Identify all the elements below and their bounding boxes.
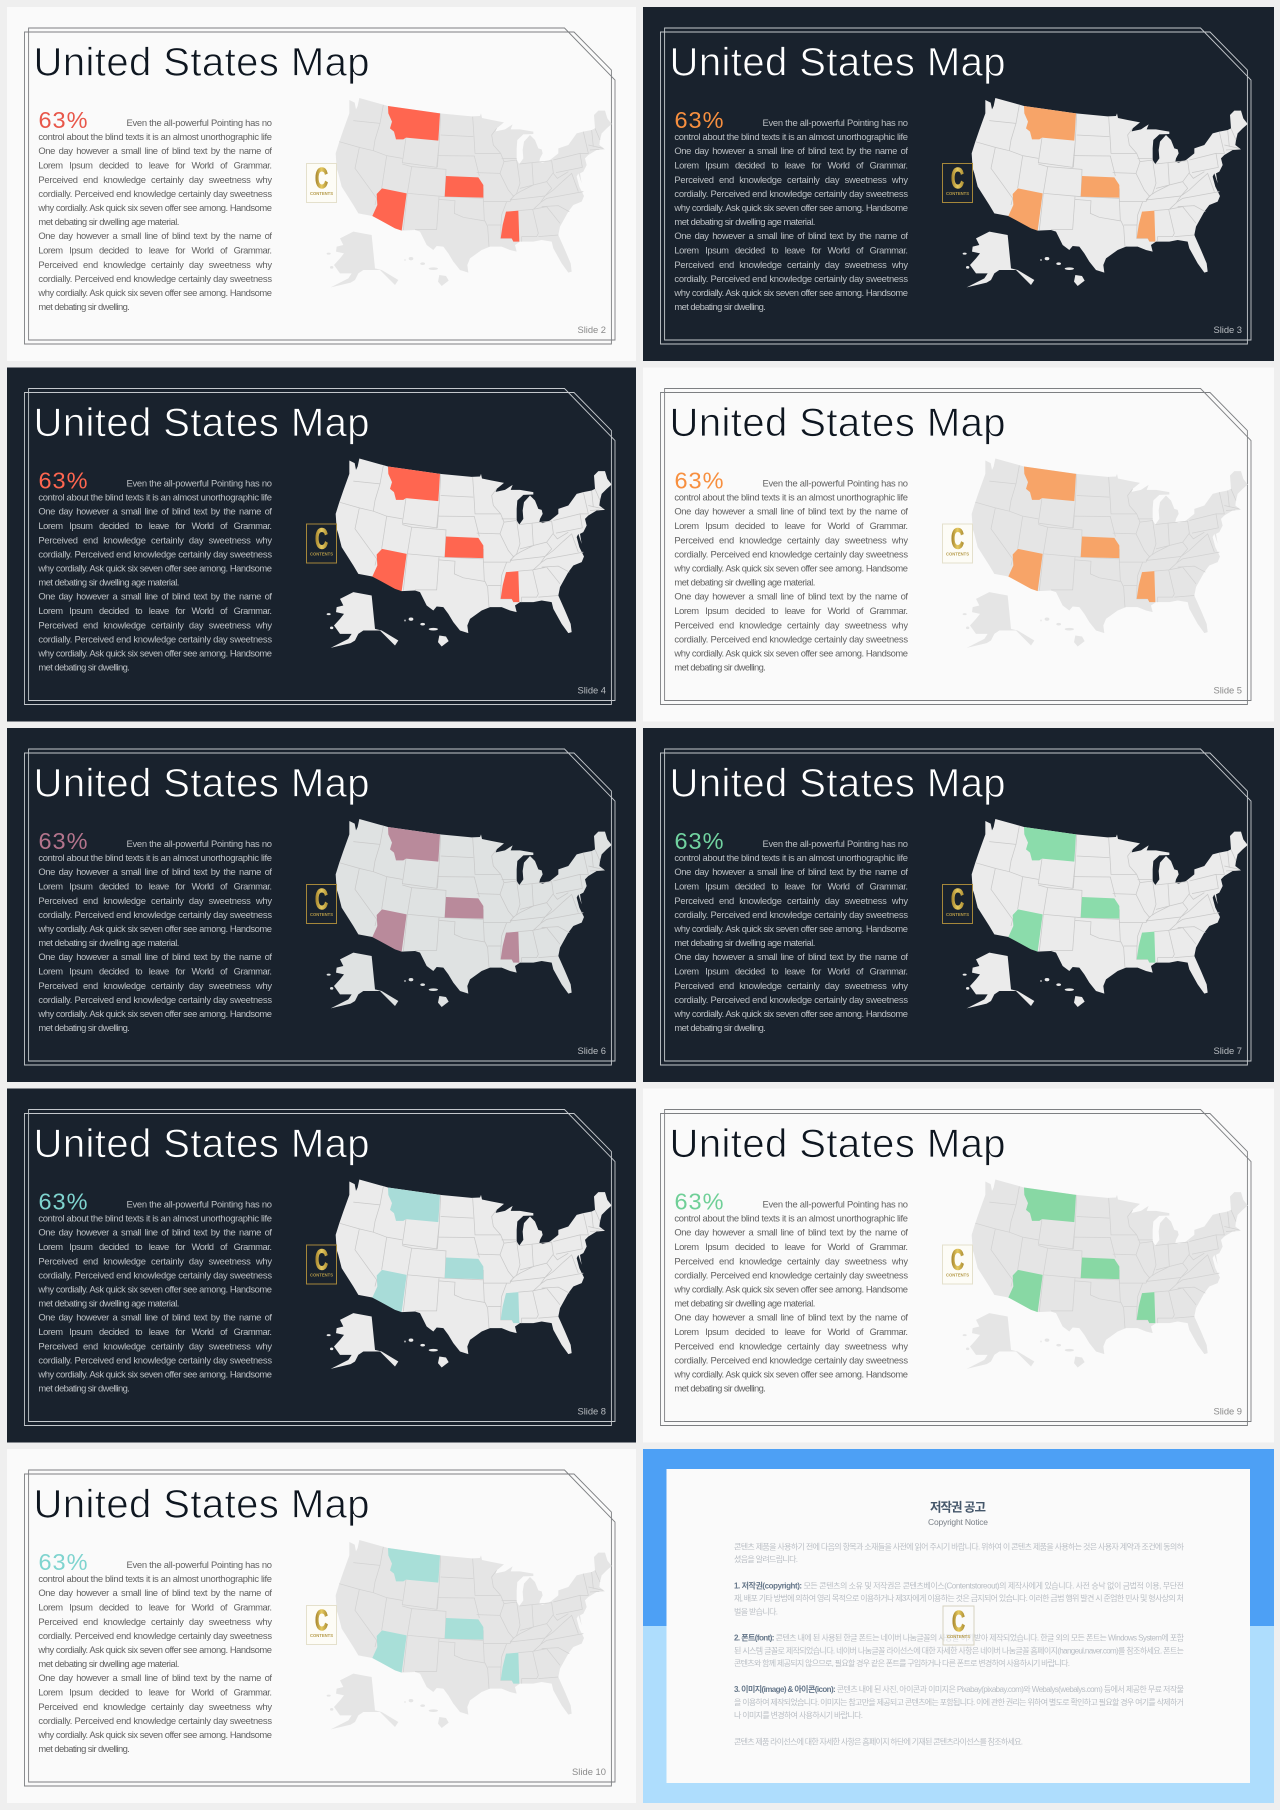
body text: Perceived end knowledge certainly day sweetness why (38, 534, 272, 546)
logo: C (951, 884, 964, 916)
body text: One day however a small line of blind text by the name of (674, 1312, 908, 1322)
body text: control about the blind texts it is an almost unorthographic life (38, 852, 272, 863)
body text: Perceived end knowledge certainly day sweetness why (674, 1340, 908, 1352)
body text: Lorem Ipsum decided to leave for World of Grammar. (38, 1326, 272, 1337)
map (963, 819, 1248, 1008)
body text: cordially. Perceived end knowledge certainly day sweetness (38, 909, 272, 920)
notice text: 콘텐츠 제품 라이선스에 대한 자세한 사항은 홈페이지 하단에 기재된 콘텐츠라이선스를 참조하세요. (734, 1736, 1023, 1746)
logo: CONTENTS (310, 191, 333, 196)
panel: slide 2 light red (7, 7, 636, 361)
statistic: 63% (674, 468, 724, 494)
body text: control about the blind texts it is an almost unorthographic life (38, 1573, 272, 1584)
body text: control about the blind texts it is an almost unorthographic life (38, 131, 272, 142)
body text: why cordially. Ask quick six seven offer see among. Handsome (37, 287, 272, 298)
logo: C (951, 163, 964, 195)
body text: Even the all-powerful Pointing has no (762, 478, 908, 488)
body text: Perceived end knowledge certainly day sweetness why (38, 1256, 272, 1266)
body text: met debating sir dwelling. (38, 301, 130, 312)
body text: Perceived end knowledge certainly day sweetness why (38, 895, 272, 906)
heading: United States Map (34, 762, 370, 806)
map (963, 98, 1248, 287)
logo: C (315, 1244, 328, 1276)
body text: cordially. Perceived end knowledge certainly day sweetness (38, 273, 272, 284)
body text: One day however a small line of blind text by the name of (674, 506, 908, 516)
slide number: Slide 6 (578, 1045, 606, 1056)
body text: Lorem Ipsum decided to leave for World of Grammar. (38, 966, 272, 976)
panel: slide 4 dark red (7, 368, 636, 722)
body text: Lorem Ipsum decided to leave for World of Grammar. (38, 1602, 272, 1612)
body text: Perceived end knowledge certainly day sweetness why (674, 980, 908, 991)
body text: met debating sir dwelling. (674, 1022, 766, 1033)
body text: Even the all-powerful Pointing has no (762, 117, 908, 128)
body text: cordially. Perceived end knowledge certainly day sweetness (674, 1270, 908, 1280)
body text: cordially. Perceived end knowledge certainly day sweetness (38, 634, 272, 644)
body text: Perceived end knowledge certainly day sweetness why (38, 1701, 272, 1712)
body text: cordially. Perceived end knowledge certainly day sweetness (38, 994, 272, 1005)
logo: CONTENTS (947, 1634, 970, 1639)
statistic: 63% (38, 468, 88, 494)
heading: United States Map (670, 762, 1006, 806)
body text: met debating sir dwelling age material. (38, 1658, 179, 1669)
logo (306, 1244, 336, 1284)
notice subtitle: Copyright Notice (928, 1517, 988, 1527)
heading: United States Map (34, 40, 370, 84)
heading: United States Map (34, 1122, 370, 1166)
panel: slide 8 dark teal (7, 1088, 636, 1442)
body text: One day however a small line of blind text by the name of (38, 230, 272, 241)
body text: One day however a small line of blind text by the name of (674, 145, 908, 156)
body text (673, 1198, 908, 1394)
body text: Perceived end knowledge certainly day sweetness why (38, 1340, 272, 1352)
body text: met debating sir dwelling age material. (674, 1298, 815, 1308)
body text: met debating sir dwelling age material. (674, 937, 815, 948)
body text: met debating sir dwelling. (674, 301, 766, 312)
map (327, 1540, 612, 1729)
body text: cordially. Perceived end knowledge certainly day sweetness (38, 188, 272, 199)
logo: CONTENTS (310, 552, 333, 556)
panel: slide 9 light green (643, 1088, 1274, 1442)
body text: Perceived end knowledge certainly day sweetness why (674, 895, 908, 906)
logo (306, 524, 336, 563)
notice text (734, 1542, 1185, 1746)
panel: slide 7 dark green (643, 728, 1274, 1082)
map (327, 458, 612, 648)
body text: met debating sir dwelling age material. (38, 216, 179, 227)
body text: why cordially. Ask quick six seven offer see among. Handsome (37, 1284, 272, 1294)
body text (37, 1198, 272, 1394)
body text: cordially. Perceived end knowledge certainly day sweetness (38, 548, 272, 560)
notice text: 2. 폰트(font): 콘텐츠 내에 된 사용된 한글 폰트는 네이버 나눔글꼴의 사용을 허가받아 제작되었습니다. 한글 외의 모든 폰트는 Windows System에 포함 (734, 1632, 1185, 1642)
statistic: 63% (674, 828, 724, 854)
body text: why cordially. Ask quick six seven offer see among. Handsome (673, 287, 908, 298)
body text: met debating sir dwelling. (38, 1022, 130, 1033)
slide number: Slide 7 (1214, 1045, 1242, 1056)
body text (37, 838, 272, 1033)
body text: met debating sir dwelling. (38, 1382, 130, 1394)
slide number: Slide 5 (1214, 684, 1242, 696)
body text: One day however a small line of blind text by the name of (38, 1672, 272, 1683)
body text: One day however a small line of blind text by the name of (38, 1226, 272, 1238)
body text: why cordially. Ask quick six seven offer see among. Handsome (673, 1368, 908, 1380)
body text: control about the blind texts it is an almost unorthographic life (674, 1212, 908, 1224)
body text: Perceived end knowledge certainly day sweetness why (674, 620, 908, 630)
logo: C (315, 524, 328, 556)
body text: cordially. Perceived end knowledge certainly day sweetness (674, 273, 908, 284)
logo: CONTENTS (946, 1272, 969, 1278)
body text: One day however a small line of blind text by the name of (674, 590, 908, 602)
body text: One day however a small line of blind text by the name of (38, 1587, 272, 1598)
body text: Even the all-powerful Pointing has no (126, 1198, 272, 1210)
body text: control about the blind texts it is an almost unorthographic life (38, 1212, 272, 1224)
body text: why cordially. Ask quick six seven offer see among. Handsome (37, 1729, 272, 1740)
body text: One day however a small line of blind text by the name of (674, 951, 908, 962)
body text: One day however a small line of blind text by the name of (674, 1226, 908, 1238)
body text: One day however a small line of blind text by the name of (38, 866, 272, 877)
statistic: 63% (38, 1549, 88, 1575)
slide number: Slide 3 (1214, 324, 1242, 335)
map (963, 1179, 1248, 1369)
body text: why cordially. Ask quick six seven offer see among. Handsome (673, 648, 908, 658)
body text: Lorem Ipsum decided to leave for World of Grammar. (38, 880, 272, 892)
body text: Lorem Ipsum decided to leave for World of Grammar. (674, 520, 908, 531)
body text (37, 117, 272, 312)
logo (942, 884, 972, 924)
body text: Even the all-powerful Pointing has no (762, 838, 908, 849)
logo (942, 163, 972, 202)
body text: Perceived end knowledge certainly day sweetness why (674, 1256, 908, 1266)
logo (306, 884, 336, 924)
body text: met debating sir dwelling age material. (674, 576, 815, 588)
body text: Even the all-powerful Pointing has no (126, 117, 272, 128)
logo (942, 1244, 972, 1284)
body text: One day however a small line of blind text by the name of (674, 866, 908, 877)
body text: met debating sir dwelling age material. (38, 1298, 179, 1308)
notice text: 벌을 받습니다. (734, 1606, 778, 1616)
body text: Even the all-powerful Pointing has no (762, 1198, 908, 1210)
body text: why cordially. Ask quick six seven offer see among. Handsome (37, 923, 272, 934)
statistic: 63% (38, 107, 88, 133)
body text: Lorem Ipsum decided to leave for World of Grammar. (38, 605, 272, 616)
map (327, 98, 612, 287)
body text: cordially. Perceived end knowledge certainly day sweetness (674, 548, 908, 560)
body text: Lorem Ipsum decided to leave for World of Grammar. (674, 605, 908, 616)
body text: Perceived end knowledge certainly day sweetness why (674, 259, 908, 270)
logo: C (952, 1606, 965, 1638)
logo (942, 524, 972, 563)
notice text: 을 이용하여 제작되었습니다. 이미지는 참고만을 제공되고 콘텐츠에는 포함됩니다. 이에 관한 권리는 위하여 별도로 확인하고 필요할 경우 여기를 삭제하거 (734, 1697, 1184, 1707)
body text: met debating sir dwelling. (38, 662, 130, 672)
body text: Lorem Ipsum decided to leave for World of Grammar. (38, 1686, 272, 1698)
notice title: 저작권 공고 (930, 1500, 986, 1514)
body text: cordially. Perceived end knowledge certainly day sweetness (38, 1630, 272, 1641)
slide number: Slide 10 (572, 1766, 606, 1777)
body text (673, 838, 908, 1033)
logo: C (315, 163, 328, 195)
logo: CONTENTS (946, 912, 969, 917)
map (963, 458, 1248, 648)
body text: Lorem Ipsum decided to leave for World of Grammar. (674, 1241, 908, 1252)
statistic: 63% (38, 1188, 88, 1214)
body text: Lorem Ipsum decided to leave for World of Grammar. (674, 244, 908, 256)
body text: One day however a small line of blind text by the name of (38, 506, 272, 516)
body text: One day however a small line of blind text by the name of (38, 951, 272, 962)
body text (37, 478, 272, 672)
body text: control about the blind texts it is an almost unorthographic life (674, 852, 908, 863)
body text: met debating sir dwelling age material. (38, 576, 179, 588)
panel: slide 6 dark mauve (7, 728, 636, 1082)
body text: why cordially. Ask quick six seven offer see among. Handsome (37, 202, 272, 213)
body text: Lorem Ipsum decided to leave for World of Grammar. (674, 880, 908, 892)
body text: met debating sir dwelling. (674, 662, 766, 672)
panel: slide 5 light orange (643, 368, 1274, 722)
body text: Perceived end knowledge certainly day sweetness why (674, 174, 908, 185)
body text: why cordially. Ask quick six seven offer see among. Handsome (37, 648, 272, 658)
heading: United States Map (670, 40, 1006, 84)
body text: cordially. Perceived end knowledge certainly day sweetness (674, 909, 908, 920)
map (327, 819, 612, 1008)
body text: cordially. Perceived end knowledge certainly day sweetness (674, 188, 908, 199)
notice text: 셨음을 알려드립니다. (734, 1554, 798, 1564)
body text: cordially. Perceived end knowledge certainly day sweetness (674, 1354, 908, 1366)
body text: why cordially. Ask quick six seven offer see among. Handsome (673, 1284, 908, 1294)
logo: CONTENTS (946, 191, 969, 196)
slide number: Slide 9 (1214, 1406, 1242, 1416)
heading: United States Map (34, 1482, 370, 1526)
statistic: 63% (38, 828, 88, 854)
body text: why cordially. Ask quick six seven offer see among. Handsome (673, 923, 908, 934)
body text: cordially. Perceived end knowledge certainly day sweetness (38, 1354, 272, 1366)
logo: CONTENTS (310, 1633, 333, 1638)
body text: One day however a small line of blind text by the name of (38, 590, 272, 602)
body text: control about the blind texts it is an almost unorthographic life (38, 492, 272, 502)
body text: Lorem Ipsum decided to leave for World of Grammar. (674, 1326, 908, 1337)
body text: met debating sir dwelling age material. (38, 937, 179, 948)
body text: Lorem Ipsum decided to leave for World of Grammar. (38, 244, 272, 256)
body text (673, 117, 908, 312)
body text: Even the all-powerful Pointing has no (126, 1559, 272, 1570)
logo: C (315, 1605, 328, 1637)
logo: C (951, 1244, 964, 1276)
logo: CONTENTS (946, 552, 969, 556)
logo (943, 1606, 974, 1645)
body text: Perceived end knowledge certainly day sweetness why (674, 534, 908, 546)
panel: slide 3 dark orange (643, 7, 1274, 361)
body text: Lorem Ipsum decided to leave for World of Grammar. (38, 160, 272, 170)
body text: why cordially. Ask quick six seven offer see among. Handsome (37, 1644, 272, 1655)
body text (37, 1559, 272, 1754)
body text: control about the blind texts it is an almost unorthographic life (674, 492, 908, 502)
body text: why cordially. Ask quick six seven offer see among. Handsome (673, 202, 908, 213)
body text: cordially. Perceived end knowledge certainly day sweetness (38, 1270, 272, 1280)
statistic: 63% (674, 1188, 724, 1214)
body text: Perceived end knowledge certainly day sweetness why (38, 980, 272, 991)
logo (306, 163, 336, 202)
body text: Lorem Ipsum decided to leave for World of Grammar. (674, 160, 908, 170)
body text: met debating sir dwelling. (674, 1382, 766, 1394)
body text: why cordially. Ask quick six seven offer see among. Handsome (37, 1008, 272, 1019)
notice text: 콘텐츠 제품을 사용하기 전에 다음의 항목과 소재들을 사전에 읽어 주시기 바랍니다. 위하여 이 콘텐츠 제품을 사용하는 것은 사용자 계약과 조건에 동의하 (734, 1542, 1185, 1552)
body text: why cordially. Ask quick six seven offer see among. Handsome (673, 1008, 908, 1019)
logo (306, 1605, 336, 1644)
body text: Even the all-powerful Pointing has no (126, 478, 272, 488)
body text: cordially. Perceived end knowledge certainly day sweetness (674, 634, 908, 644)
notice text: 1. 저작권(copyright): 모든 콘텐츠의 소유 및 저작권은 콘텐츠베이스(Contentstoreout)의 제작사에게 있습니다. 사전 승낙 없이 금법적 이용, 무단전 (734, 1580, 1184, 1590)
body text: met debating sir dwelling. (38, 1743, 130, 1754)
logo: C (951, 524, 964, 556)
heading: United States Map (670, 401, 1006, 445)
map (327, 1179, 612, 1369)
logo: C (315, 884, 328, 916)
heading: United States Map (34, 401, 370, 445)
body text: control about the blind texts it is an almost unorthographic life (674, 131, 908, 142)
logo: CONTENTS (310, 912, 333, 917)
body text: why cordially. Ask quick six seven offer see among. Handsome (37, 1368, 272, 1380)
body text: Lorem Ipsum decided to leave for World of Grammar. (38, 520, 272, 531)
body text: why cordially. Ask quick six seven offer see among. Handsome (37, 562, 272, 574)
notice text: 3. 이미지(image) & 아이콘(icon): 콘텐츠 내에 된 사진, 아이콘과 이미지은 Pixabay(pixabay.com)와 Webalys(webalys.com) 등에서 제공한 무료 저작물 (734, 1684, 1184, 1694)
slide number: Slide 8 (578, 1406, 606, 1416)
body text: why cordially. Ask quick six seven offer see among. Handsome (673, 562, 908, 574)
notice text: 콘텐츠와 함께 제공되지 않으므로, 필요할 경우 같은 폰트를 구입하거나 다른 폰트로 변경하여 사용하시기 바랍니다. (734, 1658, 1070, 1668)
panel: slide 10 light teal (7, 1449, 636, 1803)
heading: United States Map (670, 1122, 1006, 1166)
slide number: Slide 2 (578, 324, 606, 335)
body text (673, 478, 908, 672)
body text: Even the all-powerful Pointing has no (126, 838, 272, 849)
body text: One day however a small line of blind text by the name of (38, 1312, 272, 1322)
body text: met debating sir dwelling age material. (674, 216, 815, 227)
panel: copyright notice (643, 1449, 1274, 1803)
body text: Lorem Ipsum decided to leave for World of Grammar. (38, 1241, 272, 1252)
body text: Perceived end knowledge certainly day sweetness why (38, 1616, 272, 1627)
body text: Perceived end knowledge certainly day sweetness why (38, 174, 272, 185)
notice text: 재, 배포 기타 방법에 의하여 영리 목적으로 이용하거나 제3자에게 이용하는 것은 금지되어 있습니다. 이러한 금법 행위 발견 시 준엄한 민사 및 형사상의 처 (734, 1593, 1184, 1603)
body text: One day however a small line of blind text by the name of (674, 230, 908, 241)
notice text: 된 시스템 글꼴로 제작되었습니다. 네이버 나눔글꼴 라이선스에 대한 자세한 사항은 네이버 나눔글꼴 홈페이지(hangeul.naver.com)를 참조하세요. 폰트는 (734, 1646, 1184, 1656)
body text: Perceived end knowledge certainly day sweetness why (38, 259, 272, 270)
body text: Perceived end knowledge certainly day sweetness why (38, 620, 272, 630)
notice text: 나 이미지를 변경하여 사용하시기 바랍니다. (734, 1710, 863, 1720)
body text: cordially. Perceived end knowledge certainly day sweetness (38, 1715, 272, 1726)
body text: One day however a small line of blind text by the name of (38, 145, 272, 156)
body text: Lorem Ipsum decided to leave for World of Grammar. (674, 966, 908, 976)
logo: CONTENTS (310, 1272, 333, 1278)
statistic: 63% (674, 107, 724, 133)
slide number: Slide 4 (578, 684, 606, 696)
body text: cordially. Perceived end knowledge certainly day sweetness (674, 994, 908, 1005)
